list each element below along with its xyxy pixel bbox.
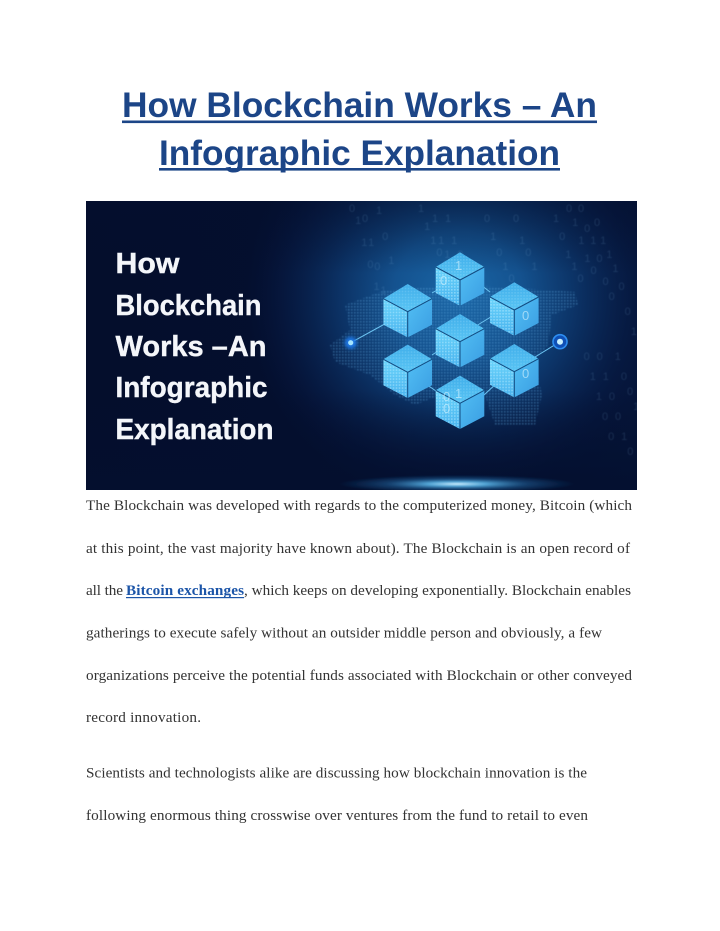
paragraph 1: record innovation. <box>86 709 201 726</box>
binary digit columns: 01010 <box>484 213 515 285</box>
paragraph 1 <box>86 497 632 726</box>
connector lines <box>351 281 560 395</box>
digits over cubes: 1 <box>455 386 462 401</box>
cube: top <box>436 252 484 306</box>
binary digit columns: 01110010010 <box>566 203 633 458</box>
binary digit columns: 001000100100 <box>578 203 652 443</box>
cube: lower left <box>383 345 432 398</box>
paragraph 1: organizations perceive the potential funds associated with Blockchain or other conveyed <box>86 667 632 684</box>
binary digit columns: 1011001100 <box>553 213 614 443</box>
paragraph 2: following enormous thing crosswise over ventures from the fund to retail to even <box>86 807 588 824</box>
digits over cubes: 0 <box>522 308 529 323</box>
binary digit columns: 01011 <box>362 213 393 321</box>
cube: lower right <box>490 344 539 397</box>
digits over cubes: 0 <box>443 389 450 404</box>
digits over cubes: 0 <box>443 401 450 416</box>
image heading text: Works –An <box>116 331 266 363</box>
paragraph 1: , which keeps on developing exponentially. Blockchain enables <box>244 582 631 599</box>
cube: right <box>490 282 539 336</box>
digits over cubes <box>440 258 529 416</box>
hero image panel <box>86 201 686 493</box>
digits over cubes: 1 <box>455 258 462 273</box>
binary digit columns: 111 <box>432 213 450 261</box>
paragraph 2 <box>86 764 588 824</box>
cube: left <box>383 284 432 337</box>
binary digit columns <box>350 204 637 455</box>
binary digit columns: 11101 <box>418 203 449 271</box>
binary digit columns: 0101 <box>513 213 538 273</box>
paragraph 1: all the <box>86 582 123 599</box>
digits over cubes: 0 <box>522 366 529 381</box>
paragraph 2: Scientists and technologists alike are discussing how blockchain innovation is the <box>86 764 587 782</box>
paragraph 1: The Blockchain was developed with regards to the computerized money, Bitcoin (which <box>86 497 632 514</box>
image heading text: Explanation <box>116 414 274 446</box>
bottom light glow <box>347 476 567 490</box>
world map dot pattern <box>330 285 578 425</box>
title: How Blockchain Works – An <box>122 86 597 125</box>
binary digit columns: 1100 <box>445 213 470 273</box>
paragraph 1: gatherings to execute safely without an outsider middle person and obviously, a few <box>86 624 602 642</box>
title: Infographic Explanation <box>159 134 560 173</box>
paragraph 1: at this point, the vast majority have known about). The Blockchain is an open record of <box>86 540 631 557</box>
binary digit columns: 101 <box>376 205 394 267</box>
image heading text: How <box>116 248 180 280</box>
right node <box>553 335 567 349</box>
image heading text: Infographic <box>116 372 268 404</box>
link: Bitcoin exchanges: Bitcoin exchanges <box>126 582 244 599</box>
left node <box>345 337 357 349</box>
cube: centre <box>436 314 484 367</box>
title <box>122 86 597 173</box>
image heading text <box>116 248 274 446</box>
binary digit columns: 01101 <box>349 203 380 293</box>
cube: bottom <box>436 376 484 429</box>
digits over cubes: 0 <box>440 273 447 288</box>
cubes <box>383 252 539 429</box>
binary digit columns: 011100110010010 <box>594 217 686 483</box>
image heading text: Blockchain <box>116 290 262 322</box>
